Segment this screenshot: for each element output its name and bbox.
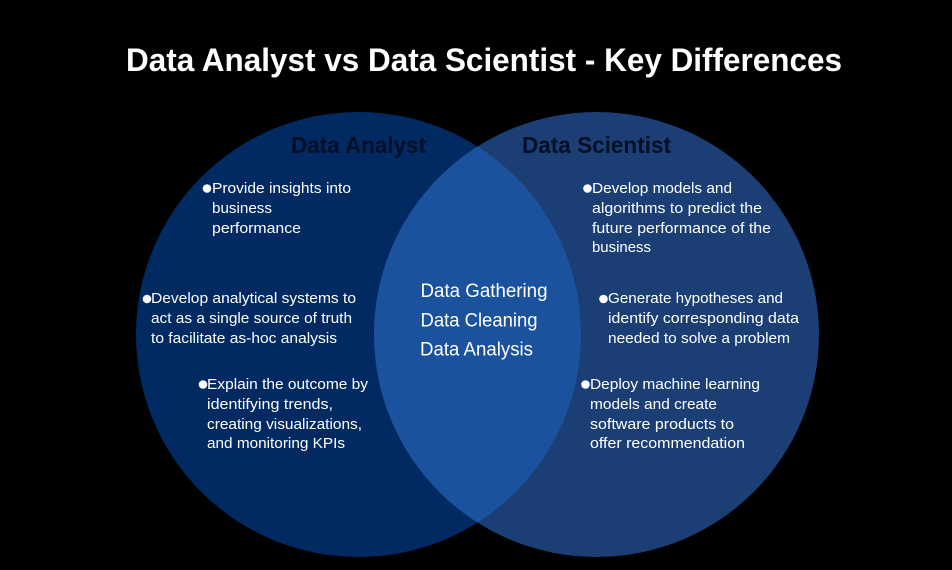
bullet: deploy machine learning: models and create xyxy=(590,396,717,413)
overlap: shared skills area xyxy=(374,146,581,522)
bullet: deploy machine learning: software products to xyxy=(590,416,734,433)
bullet: generate hypotheses: identify corresponding data xyxy=(608,310,800,327)
bullet: develop analytical systems xyxy=(143,290,356,347)
bullet: develop analytical systems: to facilitate as-hoc analysis xyxy=(151,330,337,347)
bullet: explain the outcome: identifying trends, xyxy=(207,396,333,413)
circle: data analyst xyxy=(136,112,581,557)
shared skills list: Data Analysis xyxy=(420,340,533,360)
bullet: explain the outcome: Explain the outcome by xyxy=(207,376,368,393)
bullet: deploy machine learning xyxy=(581,376,760,452)
bullet: develop models: Develop models and xyxy=(592,180,732,197)
bullet: explain the outcome xyxy=(199,376,368,452)
bullet: provide insights: business xyxy=(212,200,272,217)
bullet: explain the outcome: creating visualizations, xyxy=(207,416,362,433)
shared skills list: Data Gathering xyxy=(420,281,548,302)
bullet: deploy machine learning: Deploy machine learning xyxy=(590,376,760,393)
bullet: develop models: algorithms to predict the xyxy=(592,200,762,217)
shared skills list: Data Cleaning xyxy=(420,310,538,332)
bullet: provide insights xyxy=(203,180,351,237)
bullet: provide insights: performance xyxy=(212,220,301,237)
bullet: generate hypotheses: needed to solve a problem xyxy=(608,330,790,347)
bullet: develop models: future performance of the xyxy=(592,220,771,237)
bullet: develop models: business xyxy=(592,239,651,256)
bullet: develop analytical systems: Develop analytical systems to xyxy=(151,290,356,307)
bullet: develop models xyxy=(583,180,771,256)
bullet: generate hypotheses: Generate hypotheses and xyxy=(608,290,783,307)
shared skills list xyxy=(420,281,548,360)
circle: data scientist xyxy=(374,112,819,557)
heading: data scientist: Data Scientist xyxy=(522,132,671,158)
heading: data analyst: Data Analyst xyxy=(291,132,426,158)
bullet: explain the outcome: and monitoring KPIs xyxy=(207,435,345,452)
bullet: provide insights: Provide insights into xyxy=(212,180,351,197)
venn diagram xyxy=(136,112,819,557)
bullet: develop analytical systems: act as a single source of truth xyxy=(151,310,352,327)
bullet: generate hypotheses xyxy=(599,290,800,347)
title: Data Analyst vs Data Scientist - Key Differences xyxy=(126,42,842,78)
bullet: deploy machine learning: offer recommendation xyxy=(590,435,745,452)
